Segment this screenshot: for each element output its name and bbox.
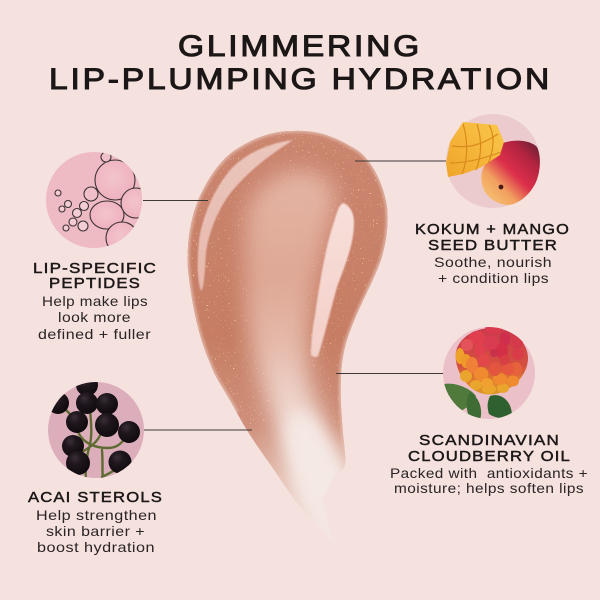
text: acai sterols: boost hydration [37,539,155,555]
lip gloss swatch [188,130,388,508]
cubed mango slice [446,122,504,177]
text: acai sterols: Help strengthen [36,507,157,523]
text: scandinavian cloudberry oil: moisture; helps soften lips [394,480,584,496]
text: kokum + mango seed butter: + condition lips [438,270,549,286]
text: lip-specific peptides: look more [58,309,131,325]
icon: peptide bubbles [46,152,142,248]
text: scandinavian cloudberry oil [390,433,588,496]
connector lines [143,161,447,430]
title [49,30,552,96]
icon: acai berries [48,382,144,478]
text: kokum + mango seed butter: SEED BUTTER [428,238,558,254]
swatch pale centre and white tail [245,170,350,545]
whole mango [481,141,540,205]
text: acai sterols [28,490,163,555]
text: scandinavian cloudberry oil: SCANDINAVIAN [419,433,560,449]
text: scandinavian cloudberry oil: CLOUDBERRY OIL [408,449,571,465]
swatch outer soft rim [188,131,388,463]
swatch base colour [188,130,388,514]
title: LIP-PLUMPING HYDRATION [49,63,552,96]
leaves [444,384,512,420]
left highlight [198,140,293,291]
swatch white tail core [280,410,344,508]
text: kokum + mango seed butter: Soothe, nourish [434,254,552,270]
red drupelets [461,324,524,376]
text: lip-specific peptides [33,261,157,342]
orange drupelets [466,357,522,388]
icon: mango [446,114,540,208]
berry cluster body [456,328,528,394]
text: kokum + mango seed butter: KOKUM + MANGO [415,222,570,238]
text: lip-specific peptides: Help make lips [42,293,148,309]
right highlight [311,203,354,357]
text: acai sterols: ACAI STEROLS [28,490,163,506]
text: kokum + mango seed butter [415,222,570,286]
text: lip-specific peptides: LIP-SPECIFIC [33,261,157,277]
yellow drupelets [456,348,509,394]
text: acai sterols: skin barrier + [46,523,145,539]
text: lip-specific peptides: defined + fuller [38,326,151,342]
icon: cloudberry [443,324,535,420]
text: scandinavian cloudberry oil: Packed with antioxidants + [390,465,588,481]
berries [52,382,140,475]
title: GLIMMERING [178,30,422,63]
text: lip-specific peptides: PEPTIDES [49,276,141,292]
glitter [185,128,390,428]
mango seed spot [499,185,503,189]
